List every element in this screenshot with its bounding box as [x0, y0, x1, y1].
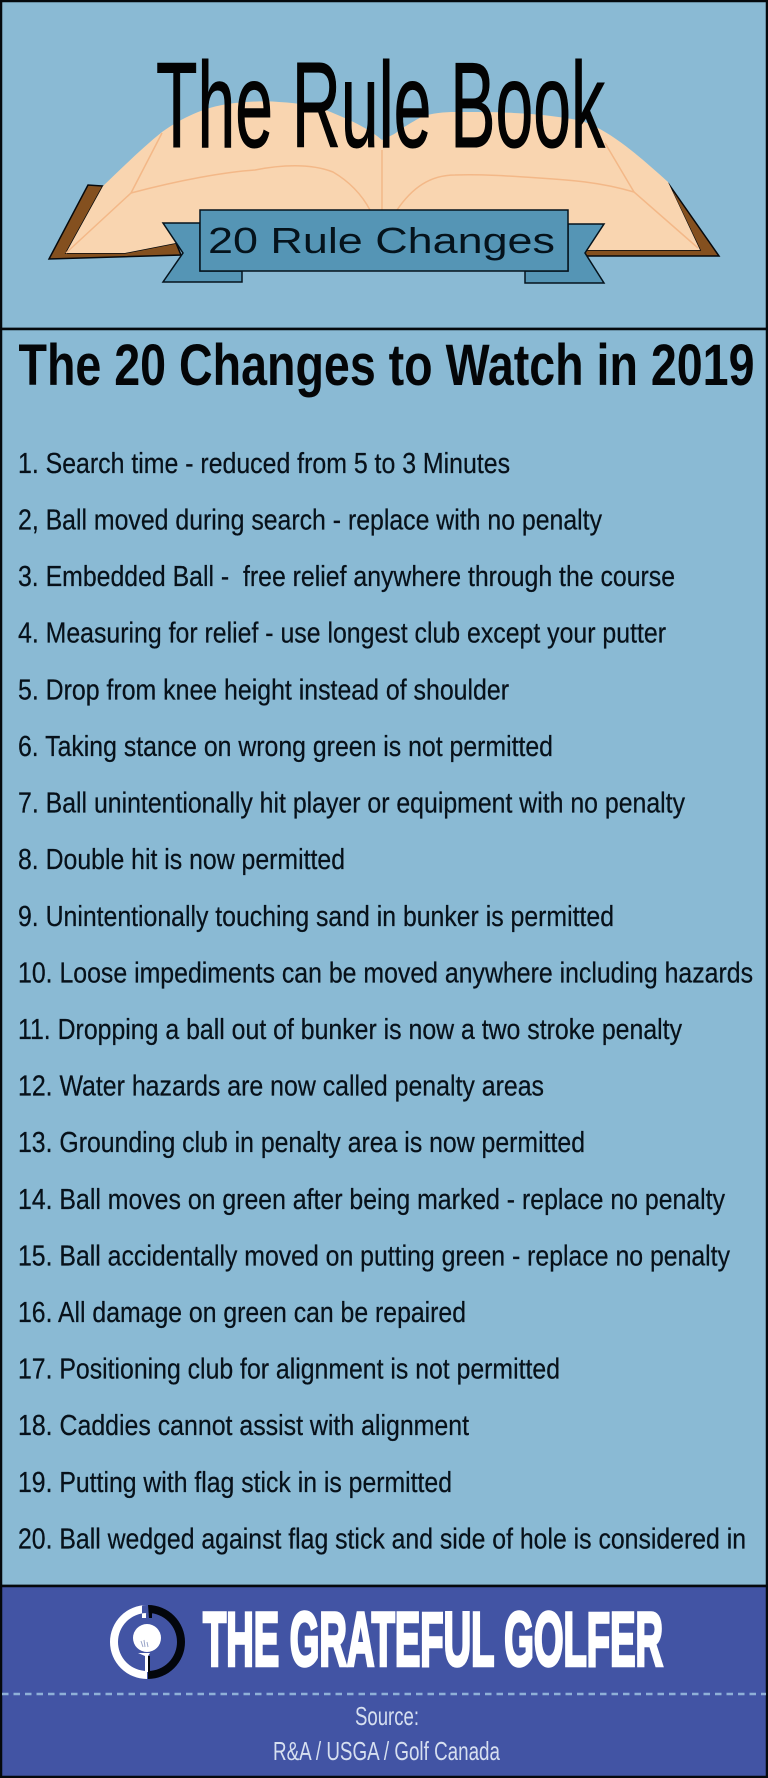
rule 3: 3. Embedded Ball - free relief anywhere through the course	[18, 561, 675, 593]
panel: rule list	[1, 329, 767, 1586]
rule 1: 1. Search time - reduced from 5 to 3 Minutes	[18, 448, 510, 480]
icon: golf ball logo	[110, 1605, 185, 1679]
source list: R&A / USGA / Golf Canada	[273, 1736, 500, 1766]
banner	[163, 210, 604, 283]
page fold lines	[66, 133, 698, 253]
rule 12: 12. Water hazards are now called penalty areas	[18, 1071, 544, 1103]
banner text: 20 Rule Changes	[208, 220, 555, 261]
rule 16: 16. All damage on green can be repaired	[18, 1297, 466, 1329]
ribbon centre	[200, 210, 568, 271]
icon: open book	[49, 101, 719, 260]
book pages	[66, 101, 700, 260]
rule 2: 2, Ball moved during search - replace with no penalty	[18, 504, 602, 536]
rule 9: 9. Unintentionally touching sand in bunker is permitted	[18, 901, 614, 933]
rule 5: 5. Drop from knee height instead of shoulder	[18, 674, 509, 706]
source label: Source:	[355, 1701, 419, 1731]
book cover right	[585, 183, 719, 256]
ribbon right tail	[525, 224, 604, 283]
rule 18: 18. Caddies cannot assist with alignment	[18, 1410, 469, 1442]
ribbon left tail	[163, 223, 242, 282]
rule 8: 8. Double hit is now permitted	[18, 844, 345, 876]
rule 4: 4. Measuring for relief - use longest club except your putter	[18, 618, 666, 650]
rule 6: 6. Taking stance on wrong green is not permitted	[18, 731, 553, 763]
rule 17: 17. Positioning club for alignment is not permitted	[18, 1354, 560, 1386]
rule 19: 19. Putting with flag stick in is permitted	[18, 1467, 452, 1499]
rule list text	[18, 448, 753, 1556]
panel: footer	[1, 1586, 767, 1777]
book cover left	[49, 185, 181, 259]
rule 13: 13. Grounding club in penalty area is now permitted	[18, 1127, 585, 1159]
panel: header	[1, 1, 767, 329]
